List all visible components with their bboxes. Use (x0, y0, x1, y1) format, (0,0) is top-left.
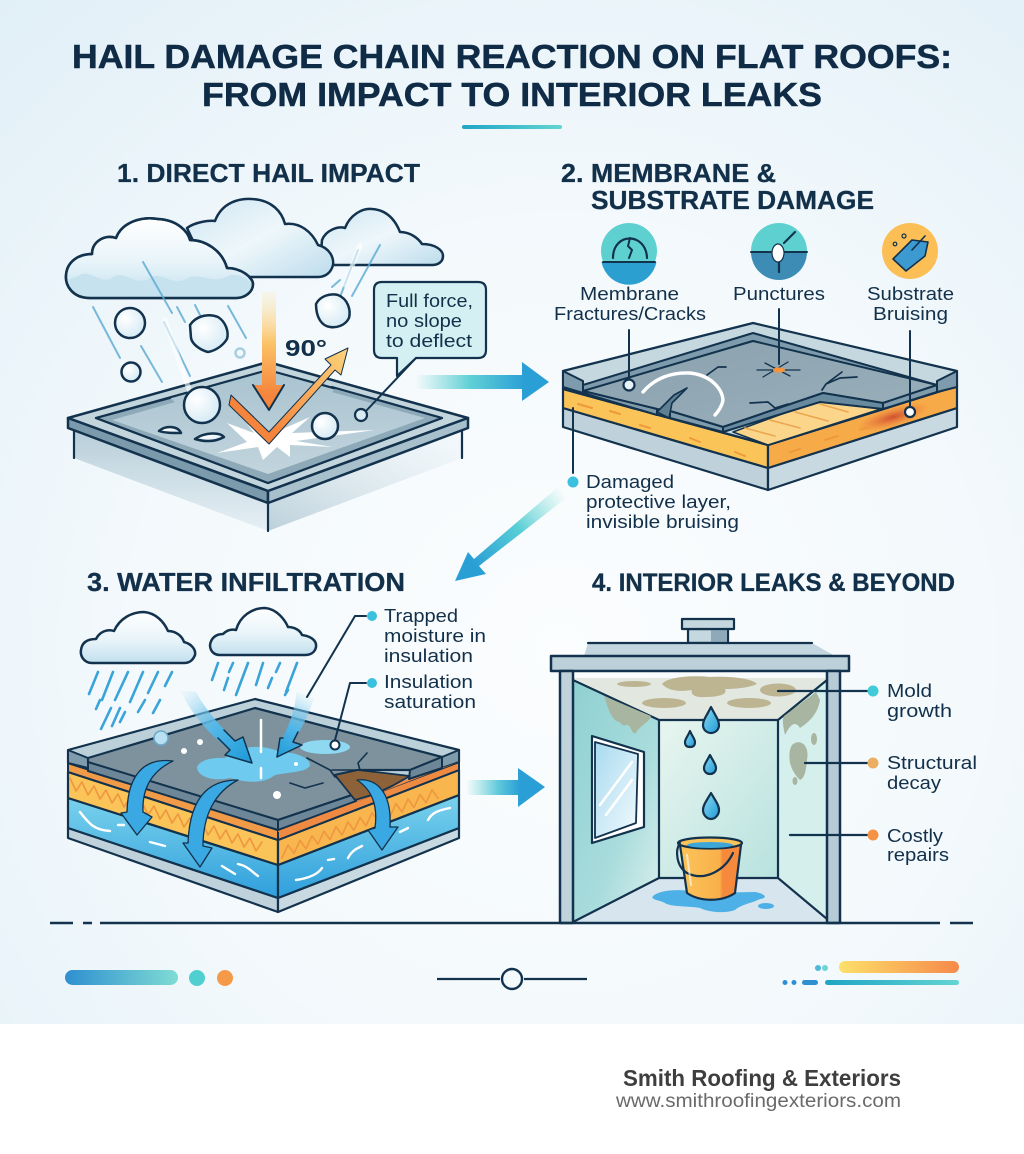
heading: step 4: 4. INTERIOR LEAKS & BEYOND (592, 569, 955, 597)
bucket (677, 838, 742, 900)
heading: step 2 (561, 158, 874, 215)
heading: step 2: SUBSTRATE DAMAGE (591, 185, 874, 215)
angle label: 90° (285, 335, 327, 361)
water puddles (154, 720, 350, 799)
grey membrane (583, 341, 937, 427)
water arrows through layers (121, 761, 398, 867)
icon: puncture (751, 223, 807, 280)
pointer lines and labels (307, 606, 486, 750)
water drops (685, 707, 719, 819)
pointer lines and labels: Insulation (384, 672, 473, 692)
footer: company (615, 1065, 901, 1112)
clouds (81, 608, 316, 663)
leader lines and labels: growth (887, 701, 952, 721)
rain (89, 663, 297, 729)
room interior (573, 678, 827, 923)
hail streaks (93, 245, 380, 382)
building columns (560, 671, 840, 923)
flat roof building (68, 362, 468, 531)
panel: membrane and substrate damage (554, 223, 957, 532)
callout: damaged protective layer (568, 472, 739, 532)
clouds (66, 199, 443, 298)
labels: damage types: Bruising (873, 304, 948, 324)
ground line (50, 922, 973, 924)
leader lines and labels: Mold (887, 681, 932, 701)
roof cross-section block (563, 323, 957, 490)
callout: damaged protective layer: Damaged (586, 472, 674, 492)
arrow: step 2 to step 3 (455, 487, 566, 581)
pointer lines and labels: Trapped (384, 606, 458, 626)
hailstones (115, 294, 350, 441)
title: HAIL DAMAGE CHAIN REACTION ON FLAT ROOFS: (72, 38, 952, 75)
labels: damage types: Punctures (733, 284, 825, 304)
title: FROM IMPACT TO INTERIOR LEAKS (202, 76, 822, 113)
pointer lines (573, 309, 915, 473)
footer: company: Smith Roofing & Exteriors (623, 1065, 901, 1091)
arrow: step 1 to step 2 (415, 362, 549, 401)
panel: interior leaks (551, 619, 977, 923)
roof section block (68, 699, 459, 912)
callout: full force: no slope (386, 311, 462, 331)
panel: water infiltration (68, 606, 486, 912)
labels: damage types (554, 284, 954, 324)
impact arrows 90 degrees (229, 292, 348, 444)
labels: damage types: Substrate (867, 284, 954, 304)
heading: step 2: 2. MEMBRANE & (561, 158, 776, 188)
leader lines and labels: decay (887, 773, 941, 793)
spilled water (652, 890, 765, 912)
roof cap (551, 643, 849, 671)
pointer lines and labels: insulation (384, 646, 473, 666)
impact starburst (217, 417, 375, 460)
labels: damage types: Membrane (580, 284, 679, 304)
footer: company: www.smithroofingexteriors.com (615, 1091, 901, 1112)
arrow: step 3 to step 4 (466, 768, 545, 807)
heading: step 1: 1. DIRECT HAIL IMPACT (117, 158, 420, 188)
exposed wood substrate (733, 400, 884, 445)
leader lines and labels (778, 681, 977, 865)
puncture mark (757, 362, 800, 377)
panel: direct hail impact (66, 199, 486, 531)
leader lines and labels: Structural (887, 753, 977, 773)
title (72, 38, 952, 129)
bruise mark (854, 396, 932, 438)
labels: damage types: Fractures/Cracks (554, 304, 706, 324)
decoration: right bars (782, 961, 959, 985)
heading: step 3: 3. WATER INFILTRATION (87, 567, 405, 597)
decoration: center divider (437, 969, 587, 989)
water arrows entering membrane (180, 690, 314, 763)
callout: damaged protective layer: protective layer, (586, 492, 731, 512)
callout: full force: Full force, (386, 291, 473, 311)
vent (682, 619, 734, 643)
window (592, 736, 644, 843)
icon: membrane crack (601, 223, 657, 285)
callout: damaged protective layer: invisible bruising (586, 512, 739, 532)
icon: substrate bruising (882, 223, 938, 279)
callout: full force: to deflect (386, 331, 472, 351)
pointer lines and labels: saturation (384, 692, 476, 712)
leader lines and labels: repairs (887, 845, 949, 865)
callout: full force (355, 282, 486, 421)
leader lines and labels: Costly (887, 826, 943, 846)
decoration: left progress bar (65, 970, 233, 986)
crack marks (643, 373, 723, 415)
pointer lines and labels: moisture in (384, 626, 486, 646)
mold stains (617, 676, 796, 708)
